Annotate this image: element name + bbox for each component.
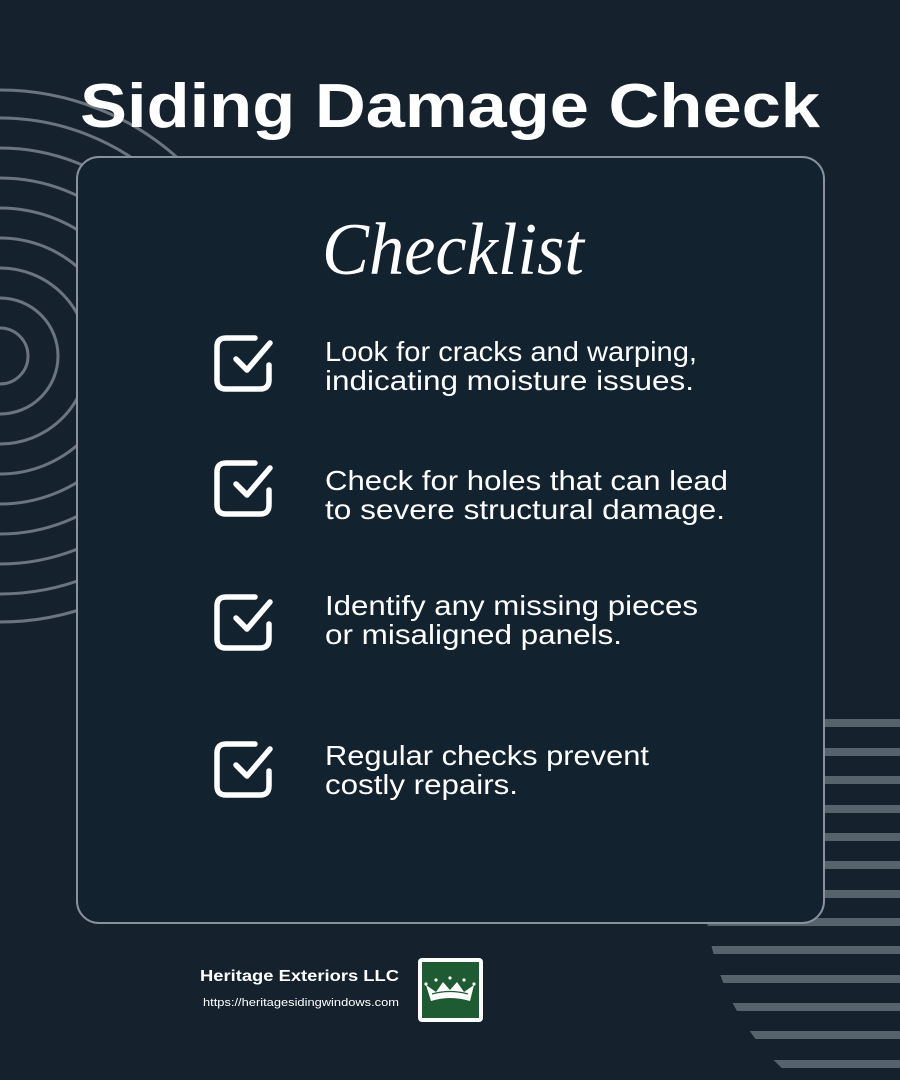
icon: checkbox xyxy=(217,744,270,795)
title: Siding Damage Check xyxy=(80,72,821,141)
icon: checkbox xyxy=(217,338,270,389)
item 2 xyxy=(217,463,728,525)
item 1 xyxy=(217,336,697,396)
item 4: Regular checks prevent xyxy=(325,740,649,771)
item 2: to severe structural damage. xyxy=(325,494,725,525)
icon: checkbox xyxy=(217,597,270,648)
panel: checklist xyxy=(77,157,824,923)
item 1: Look for cracks and warping, xyxy=(325,336,697,367)
heading: Checklist: Checklist xyxy=(322,209,586,291)
item 4 xyxy=(217,740,649,800)
decoration: striped circle xyxy=(708,719,900,1068)
item 3: or misaligned panels. xyxy=(325,619,622,650)
item 4: costly repairs. xyxy=(325,769,518,800)
item 1: indicating moisture issues. xyxy=(325,365,694,396)
logo xyxy=(418,958,483,1022)
item 3: Identify any missing pieces xyxy=(325,590,698,621)
item 2: Check for holes that can lead xyxy=(325,465,728,496)
decoration: concentric arcs xyxy=(0,90,266,622)
footer: company name: Heritage Exteriors LLC xyxy=(200,968,400,985)
icon: checkbox xyxy=(217,463,270,514)
footer: url: https://heritagesidingwindows.com xyxy=(203,997,399,1009)
item 3 xyxy=(217,590,698,650)
